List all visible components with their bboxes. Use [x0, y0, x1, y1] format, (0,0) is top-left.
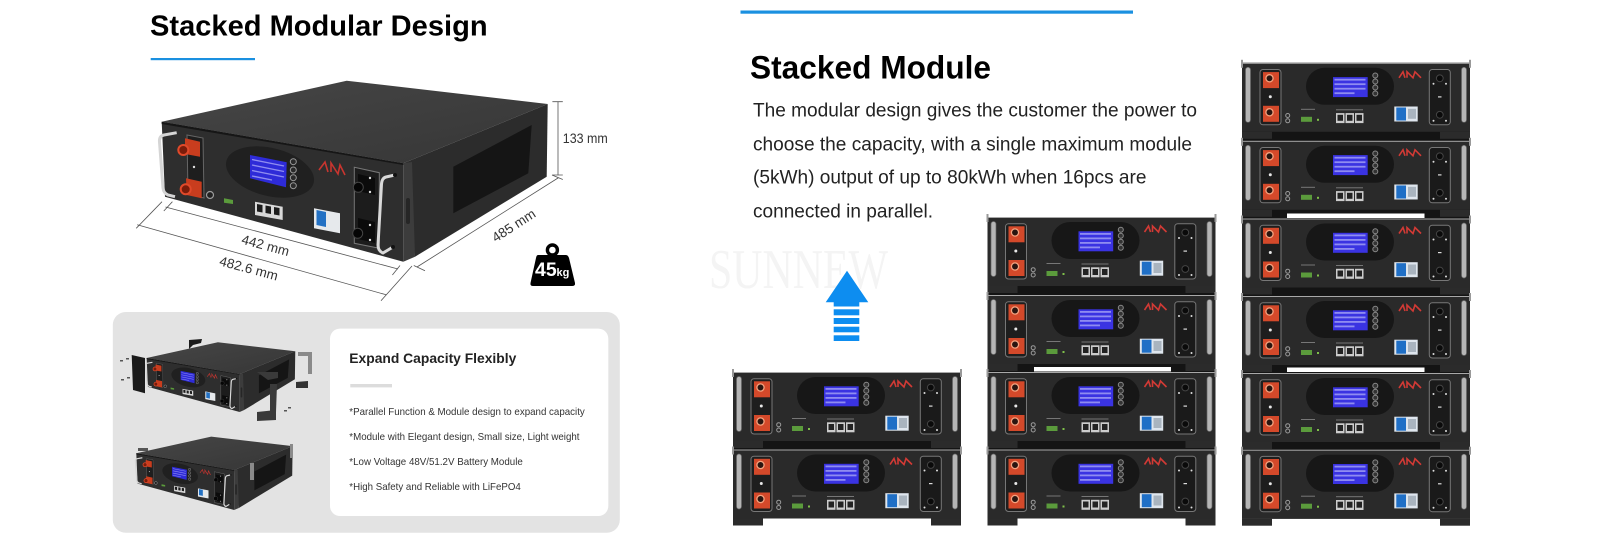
- description: The modular design gives the customer the power to: [753, 100, 1197, 122]
- stack: four modules: [986, 214, 1216, 526]
- outer width label: 482.6 mm: [218, 253, 280, 284]
- left title: Stacked Modular Design: [150, 10, 488, 42]
- module: [1241, 370, 1471, 449]
- depth label: 485 mm: [489, 206, 538, 245]
- card heading: Expand Capacity Flexibly: [349, 350, 517, 366]
- module: [732, 369, 962, 448]
- module: [1241, 447, 1471, 526]
- description: (5kWh) output of up to 80kWh when 16pcs are: [753, 168, 1146, 189]
- feature list: *High Safety and Reliable with LiFePO4: [349, 482, 521, 493]
- right top rule: [740, 10, 1133, 14]
- module: [732, 446, 962, 526]
- module: [986, 446, 1216, 526]
- icon: 45 kg weight: [530, 245, 575, 286]
- watermark: SUNNEW: [709, 239, 888, 301]
- stack: two modules: [732, 369, 962, 526]
- module: [986, 292, 1216, 371]
- height label: 133 mm: [563, 131, 608, 146]
- module: [1241, 60, 1471, 139]
- feature list: *Low Voltage 48V/51.2V Battery Module: [349, 457, 523, 468]
- feature list: *Parallel Function & Module design to expand capacity: [349, 407, 586, 418]
- icon: 45 kg weight: 45: [535, 259, 557, 281]
- inner width label: 442 mm: [240, 232, 291, 259]
- description: connected in parallel.: [753, 202, 933, 222]
- card divider: [350, 384, 392, 387]
- feature list: *Module with Elegant design, Small size, Light weight: [349, 432, 580, 443]
- module: [1241, 216, 1471, 294]
- dimension lines: [136, 102, 563, 301]
- description: [753, 100, 1197, 222]
- icon: up arrow: [826, 271, 868, 341]
- assembled battery with brackets: [135, 437, 293, 510]
- panel: expand capacity: [113, 312, 620, 533]
- feature list: [349, 407, 586, 493]
- module: [986, 369, 1216, 448]
- battery rack unit: [159, 81, 548, 262]
- module: [1241, 293, 1471, 372]
- right title: Stacked Module: [750, 50, 991, 86]
- stack: six modules: [1241, 60, 1471, 526]
- exploded battery with brackets: [120, 339, 312, 421]
- description: choose the capacity, with a single maximum module: [753, 134, 1192, 155]
- module: [986, 214, 1216, 293]
- module: [1241, 138, 1471, 217]
- text card: [330, 329, 608, 516]
- main battery with dimensions: [136, 81, 608, 301]
- left title underline: [151, 58, 255, 60]
- icon: 45 kg weight: kg: [556, 267, 569, 279]
